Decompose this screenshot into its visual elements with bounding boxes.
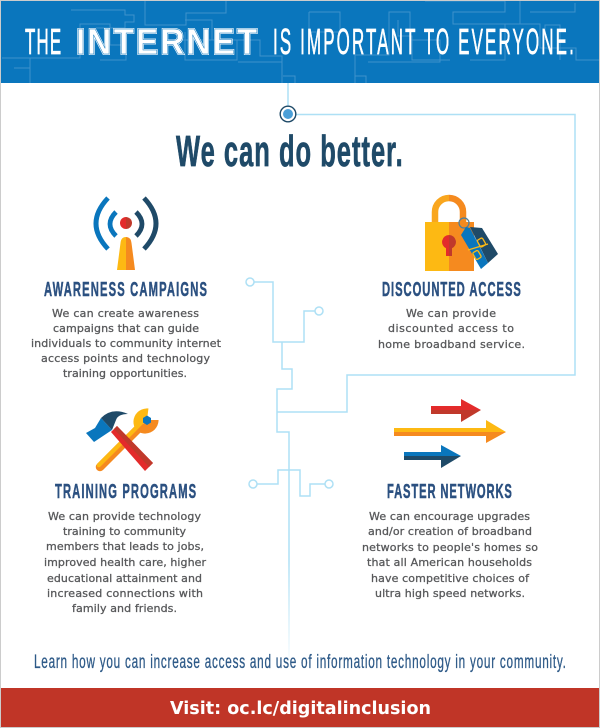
heading: INTERNET: INTERNET — [76, 23, 257, 62]
text block: We can provide technology — [48, 510, 201, 523]
text block: have competitive choices of — [371, 572, 530, 585]
circuit connector lines — [246, 83, 575, 670]
header banner — [1, 1, 599, 83]
call to action text: Learn how you can increase access and use of information technology in your community. — [34, 652, 566, 673]
text block — [44, 510, 206, 615]
panel: faster networks — [362, 399, 538, 600]
icon: hammer and wrench — [86, 404, 166, 471]
footer link text: Visit: oc.lc/digitalinclusion — [170, 698, 431, 719]
text block: members that leads to jobs, — [46, 540, 204, 553]
footer banner — [1, 688, 599, 727]
connector node — [280, 106, 296, 122]
text block: discounted access to — [388, 322, 514, 335]
text block: improved health care, higher — [44, 556, 206, 569]
text block: home broadband service. — [378, 338, 525, 351]
text block: that all American households — [367, 556, 532, 569]
heading: INTERNET: INTERNET — [76, 23, 257, 62]
text block: We can create awareness — [52, 307, 199, 320]
text block: training to community — [63, 525, 186, 538]
text block: educational attainment and — [47, 572, 202, 585]
text block: ultra high speed networks. — [375, 587, 525, 600]
icon: padlock with tag — [425, 198, 498, 271]
text block: access points and technology — [41, 352, 210, 365]
heading: FASTER NETWORKS — [387, 481, 512, 503]
text block: increased connections with — [47, 587, 203, 600]
text block: individuals to community internet — [31, 337, 222, 350]
heading: THE: THE — [25, 22, 61, 62]
text block — [362, 510, 538, 600]
header circuit pattern — [2, 1, 599, 83]
text block: family and friends. — [72, 602, 177, 615]
text block: campaigns that can guide — [53, 322, 199, 335]
main heading: We can do better. — [176, 126, 403, 176]
text block: We can provide — [406, 307, 496, 320]
panel: awareness campaigns — [31, 198, 222, 380]
heading: AWARENESS CAMPAIGNS — [44, 279, 207, 301]
text block — [378, 307, 525, 351]
text block: networks to people's homes so — [362, 541, 538, 554]
text block: training opportunities. — [63, 367, 187, 380]
heading: TRAINING PROGRAMS — [55, 481, 196, 503]
heading: is important to everyone: IS IMPORTANT TO EVERYONE. — [273, 22, 574, 62]
text block: and/or creation of broadband — [368, 525, 532, 538]
text block — [31, 307, 222, 380]
icon: arrows — [394, 399, 506, 468]
text block: We can encourage upgrades — [369, 510, 530, 523]
panel: training programs — [44, 404, 206, 615]
panel: discounted access — [378, 198, 525, 351]
heading: DISCOUNTED ACCESS — [382, 279, 521, 301]
icon: antenna — [96, 198, 156, 270]
